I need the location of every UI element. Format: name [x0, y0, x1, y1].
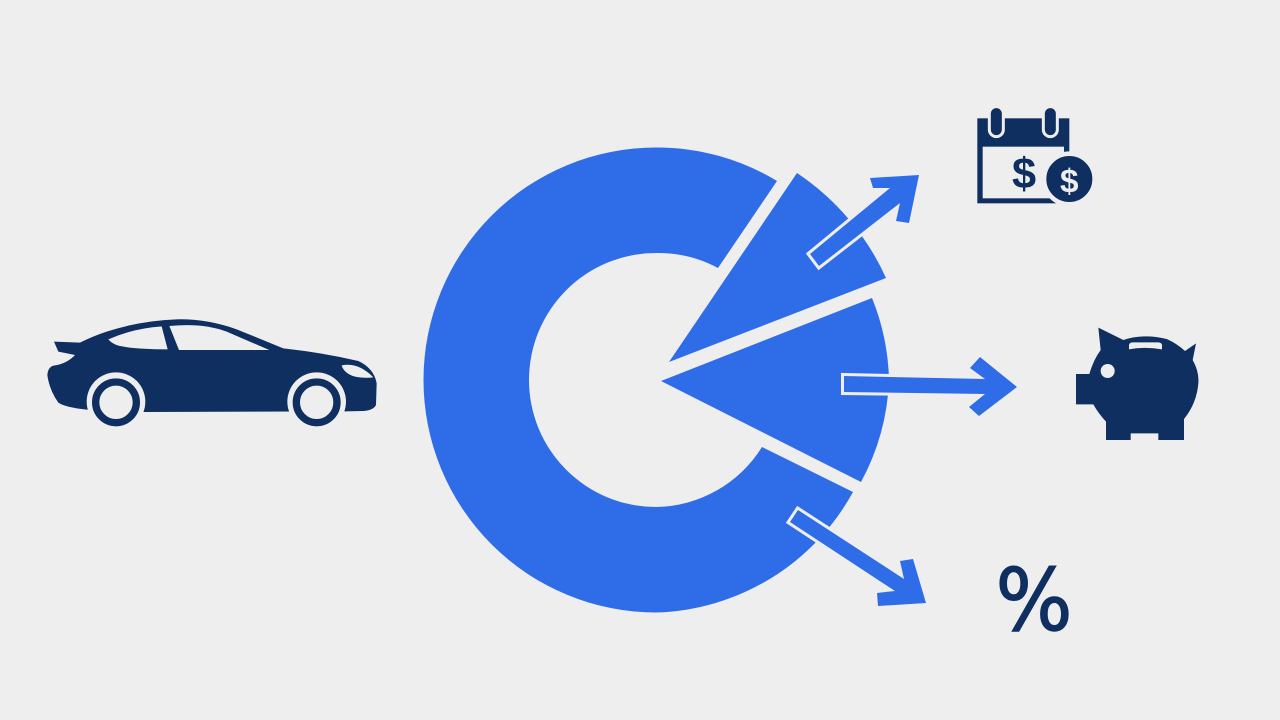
- icon: calendar with dollar: $: [1012, 150, 1036, 198]
- wedge: middle segment: [661, 298, 889, 482]
- main donut segment: [424, 147, 853, 613]
- icon: percent sign: %: [996, 551, 1072, 651]
- icon: calendar with dollar: [977, 107, 1095, 204]
- icon: car: [47, 319, 377, 432]
- arrow: to piggy bank: [844, 357, 1017, 416]
- wedge: upper segment: [669, 173, 886, 362]
- arrow: to percent: [790, 510, 926, 606]
- arrow: to calendar: [810, 175, 919, 266]
- icon: calendar with dollar: $: [1060, 163, 1079, 200]
- icon: piggy bank: [1076, 328, 1198, 440]
- chart: segmented donut: [424, 147, 889, 613]
